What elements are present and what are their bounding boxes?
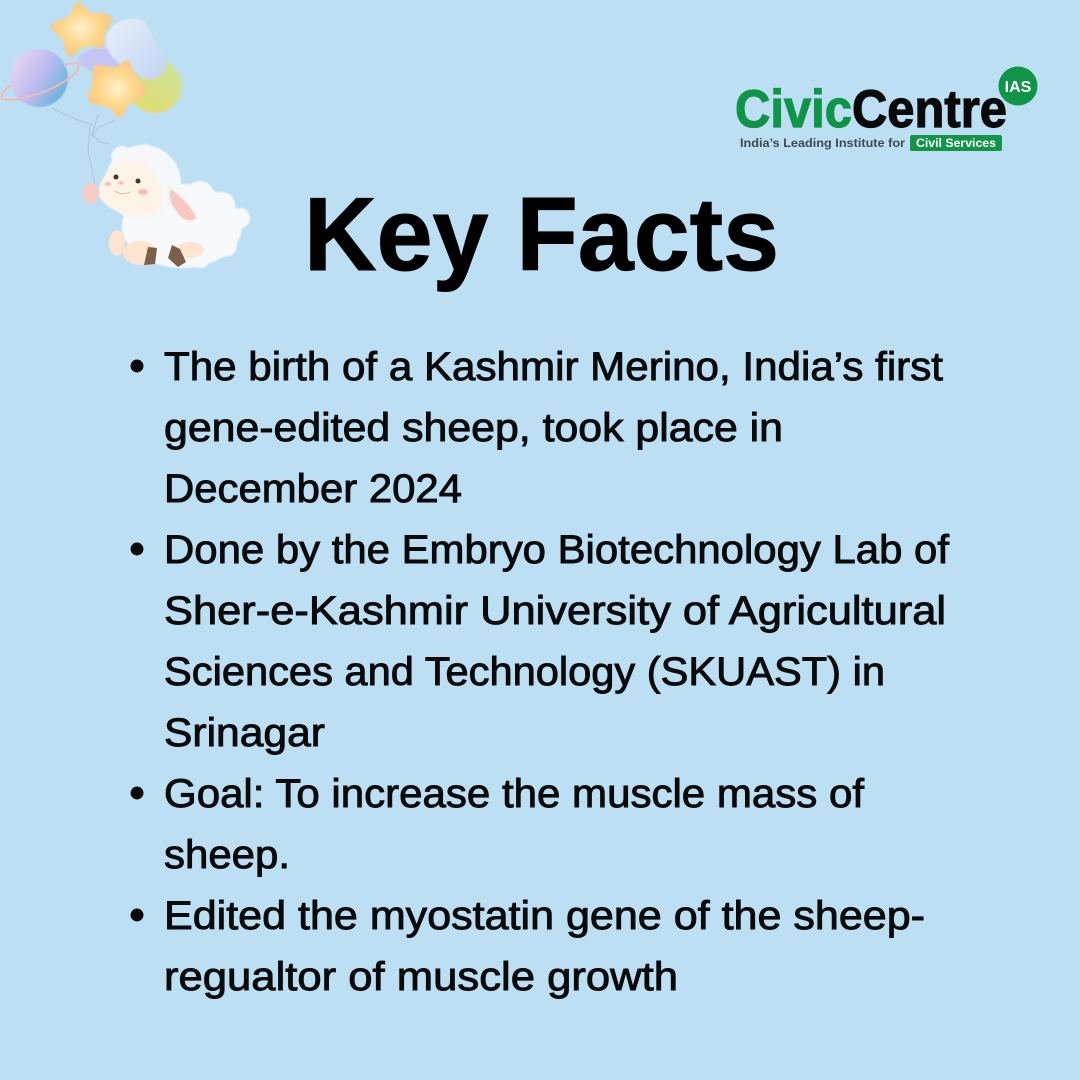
icon: ringed planet balloon: [2, 49, 79, 107]
bullet 2: [131, 528, 950, 755]
icon: lavender balloon: [79, 48, 127, 72]
logo tagline: India’s Leading Institute for: [740, 136, 905, 150]
bullet 1: [131, 345, 943, 511]
bullet 4: [131, 894, 925, 999]
bullet 2: Sher-e-Kashmir University of Agricultural: [164, 589, 946, 633]
sheep eyes: [114, 174, 140, 184]
logo tag: Civil Services: Civil Services: [916, 136, 996, 150]
logo IAS badge: [998, 66, 1038, 106]
illustration: balloons and sheep: [2, 1, 250, 268]
title: Key Facts: [304, 177, 779, 293]
bullet 2: Sciences and Technology (SKUAST) in: [164, 650, 885, 694]
sheep cheeks: [104, 181, 148, 195]
icon: lime balloon: [128, 59, 182, 113]
bullet 3: sheep.: [164, 833, 290, 877]
bullet 2: Srinagar: [164, 711, 325, 755]
sheep mouth: [115, 191, 130, 194]
sheep right ear: [169, 188, 197, 221]
icon: sheep: [83, 144, 250, 268]
icon: pale blue balloon: [106, 18, 166, 79]
bullet 1: gene-edited sheep, took place in: [164, 406, 783, 450]
sheep face: [99, 160, 163, 216]
sheep hooves: [144, 245, 186, 267]
bullet 4: Edited the myostatin gene of the sheep-: [164, 894, 925, 938]
icon: balloon strings: [52, 108, 115, 182]
logo IAS badge: IAS: [1005, 79, 1032, 96]
logo: CivicCentre IAS: [735, 66, 1038, 151]
bullet list: [131, 345, 950, 999]
bullet 1: December 2024: [164, 467, 462, 511]
logo wordmark: CivicCentre: [735, 80, 1007, 139]
bullet 3: Goal: To increase the muscle mass of: [164, 772, 865, 816]
bullet 3: [131, 772, 865, 877]
icon: top star balloon: [50, 1, 112, 56]
bullet 1: The birth of a Kashmir Merino, India’s first: [164, 345, 943, 389]
icon: lower star balloon: [88, 60, 146, 117]
sheep left ear: [83, 182, 99, 204]
sheep head wool: [105, 144, 181, 221]
bullet 2: Done by the Embryo Biotechnology Lab of: [164, 528, 950, 572]
sheep legs: [109, 230, 204, 265]
bullet 4: regualtor of muscle growth: [164, 955, 678, 999]
sheep body wool: [122, 181, 250, 268]
